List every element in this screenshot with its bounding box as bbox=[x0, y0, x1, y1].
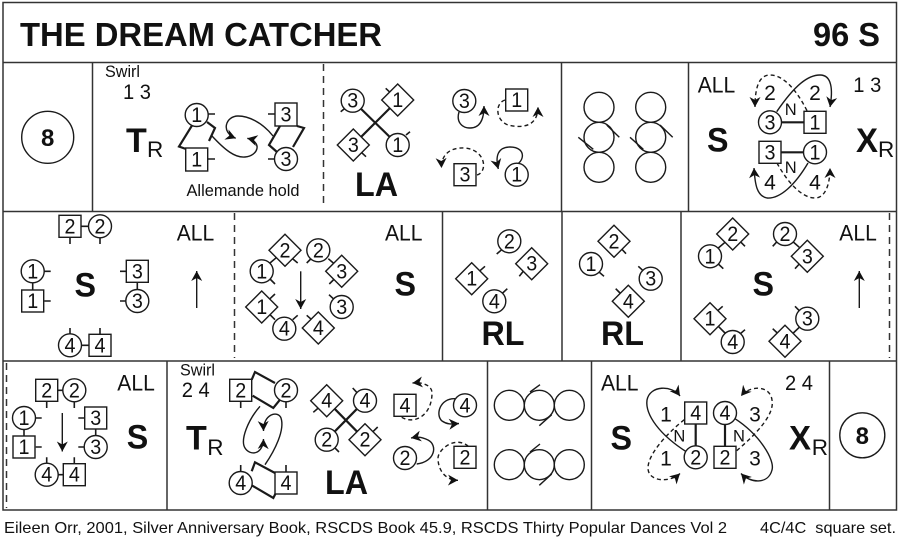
cross right symbol: X bbox=[856, 122, 878, 160]
dancer 4 circle bbox=[721, 330, 744, 354]
ticks bbox=[341, 88, 410, 157]
all label: ALL bbox=[385, 221, 422, 246]
dancer 2 square: 2 bbox=[720, 447, 730, 469]
couples 2 4: 2 4 bbox=[182, 379, 210, 402]
dancer 1 circle: 1 bbox=[586, 253, 596, 276]
panel: bars count start bbox=[22, 111, 74, 163]
couples 1 3: 1 3 bbox=[123, 81, 151, 104]
dancer 2 circle bbox=[63, 379, 86, 402]
dancer 2 diamond: 2 bbox=[609, 231, 619, 253]
dancer 3 lady bbox=[275, 103, 297, 127]
panel: left hands across 2 4 bbox=[311, 383, 476, 502]
set symbol: S bbox=[394, 265, 416, 303]
panel: bars count end: 8 bbox=[856, 423, 869, 450]
panel: left hands across bbox=[337, 84, 538, 204]
dancer 2 circle bbox=[315, 428, 338, 452]
cross right symbol bbox=[856, 122, 894, 162]
crossing paths bbox=[777, 75, 831, 112]
dancer 3 circle: 3 bbox=[336, 296, 347, 319]
panel: set advancing diamonds bbox=[694, 218, 877, 357]
bars count and nearer hands: 1 bbox=[660, 447, 672, 470]
bars count and nearer hands: 4 bbox=[809, 171, 821, 194]
ticks and links bbox=[270, 257, 334, 333]
bars count and nearer hands: 4 bbox=[764, 171, 776, 194]
ticks bbox=[480, 250, 523, 293]
panel: set retiring in diamonds bbox=[246, 221, 422, 344]
panel: reels of three bbox=[494, 385, 584, 485]
dancer 4 diamond bbox=[311, 385, 343, 417]
dancer 3 square: 3 bbox=[765, 142, 775, 164]
set symbol: S bbox=[707, 122, 728, 160]
dancer 2 circle: 2 bbox=[690, 447, 701, 469]
dancer 4 circle bbox=[714, 402, 736, 425]
arrow down bbox=[61, 413, 63, 452]
panel: set retiring square bbox=[12, 370, 155, 487]
arrow down bbox=[300, 271, 302, 309]
footer credit: Eileen Orr, 2001, Silver Anniversary Book, RSCDS Book 45.9, RSCDS Thirty Popular Dances Vol 2 bbox=[4, 520, 727, 537]
dancer 1 circle bbox=[21, 260, 44, 283]
dancer 2 circle: 2 bbox=[281, 380, 291, 402]
hand links bbox=[770, 122, 815, 152]
cross of hands bbox=[353, 100, 398, 145]
dancer 2 square bbox=[454, 446, 476, 469]
dancer 1 square bbox=[804, 111, 826, 134]
panel: set and cross right 1 3 bbox=[698, 72, 894, 198]
dancer 1 diamond bbox=[382, 84, 414, 116]
LA label: LA bbox=[355, 166, 398, 204]
dancer 4 diamond bbox=[769, 325, 801, 357]
ticks bbox=[208, 114, 275, 159]
dancer 2 square: 2 bbox=[460, 447, 470, 469]
dancer 4 diamond: 4 bbox=[313, 317, 324, 340]
dancer 3 man bbox=[274, 148, 298, 171]
panel: swirl turn 1 3 bbox=[105, 63, 304, 200]
dancer 3 diamond: 3 bbox=[336, 261, 347, 283]
dancer 2 circle bbox=[88, 215, 112, 238]
dancer 3 man: 3 bbox=[281, 148, 291, 171]
dancer 3 circle bbox=[758, 111, 782, 134]
dancer 3 diamond bbox=[326, 255, 358, 287]
dancer 4 circle: 4 bbox=[489, 291, 500, 313]
dancer 2 square: 2 bbox=[65, 216, 75, 238]
dancer 1 square: 1 bbox=[810, 112, 820, 134]
dancer 2 circle left: 2 bbox=[400, 447, 410, 470]
dancer 2 diamond: 2 bbox=[727, 223, 738, 246]
dancer 3 circle bbox=[84, 436, 107, 459]
dancer 1 circle bbox=[386, 134, 409, 157]
dancer 1 circle: 1 bbox=[810, 142, 820, 164]
cast curves bbox=[402, 383, 432, 420]
panel: rights and lefts one bbox=[456, 230, 548, 353]
dancer 2 diamond: 2 bbox=[280, 240, 290, 262]
dancer 1 circle lower: 1 bbox=[511, 164, 522, 187]
arrow up bbox=[196, 271, 198, 308]
allemande hold joins bbox=[252, 372, 280, 498]
dancer 2 square: 2 bbox=[41, 380, 52, 402]
cross right symbol bbox=[789, 420, 828, 460]
dancer 1 man bbox=[185, 104, 208, 127]
dancer 2 square bbox=[59, 215, 81, 238]
dancer 4 circle: 4 bbox=[360, 390, 370, 413]
dancer 4 circle bbox=[58, 334, 82, 357]
dancer 1 lady: 1 bbox=[191, 149, 202, 172]
dancer 3 square: 3 bbox=[132, 261, 143, 283]
cross right symbol: R bbox=[878, 137, 894, 162]
dancer 2 diamond bbox=[349, 424, 381, 456]
dancer 1 diamond: 1 bbox=[705, 308, 715, 331]
dancer 1 circle: 1 bbox=[705, 246, 715, 268]
dancer 2 diamond bbox=[717, 218, 749, 250]
dancer 4 square: 4 bbox=[400, 395, 410, 417]
dancer 1 square: 1 bbox=[27, 290, 38, 313]
couples 2 4: 2 4 bbox=[785, 372, 813, 395]
dancer 3 square: 3 bbox=[460, 164, 470, 187]
panel: set advancing square bbox=[21, 215, 214, 357]
panel: swirl turn 2 4 bbox=[180, 361, 298, 498]
dancer 4 circle bbox=[35, 463, 58, 487]
dancer 4 circle: 4 bbox=[235, 472, 246, 495]
set symbol: S bbox=[610, 420, 632, 458]
bars count and nearer hands: N bbox=[785, 101, 797, 119]
dancer 2 circle bbox=[774, 222, 796, 246]
turn right symbol: T bbox=[186, 420, 207, 458]
dancer 3 circle: 3 bbox=[802, 308, 813, 331]
dancer 3 circle: 3 bbox=[90, 436, 101, 459]
bars count and nearer hands: 1 bbox=[660, 403, 672, 426]
dancer 2 diamond: 2 bbox=[360, 429, 370, 452]
dancer 1 diamond: 1 bbox=[256, 296, 267, 319]
dancer 4 square: 4 bbox=[69, 464, 80, 487]
dancer 2 circle: 2 bbox=[95, 216, 105, 238]
RL label: RL bbox=[601, 315, 644, 353]
dancer 3 square bbox=[85, 407, 107, 430]
turn right symbol: R bbox=[147, 137, 163, 162]
dancer 1 diamond: 1 bbox=[392, 89, 403, 112]
panel: rights and lefts two bbox=[580, 225, 662, 353]
cross of hands bbox=[327, 401, 365, 440]
swirl label: Swirl bbox=[180, 361, 215, 379]
all label: ALL bbox=[601, 370, 638, 395]
dancer 1 circle bbox=[698, 245, 722, 268]
hand links bbox=[696, 413, 725, 457]
dancer 1 square bbox=[13, 436, 35, 459]
dancer 3 circle bbox=[330, 296, 353, 319]
dancer 3 square bbox=[126, 260, 148, 283]
dancer 3 circle bbox=[796, 307, 819, 331]
dancer 4 square: 4 bbox=[281, 472, 291, 495]
turn right symbol: R bbox=[207, 435, 224, 460]
dancer 3 circle lower: 3 bbox=[459, 90, 470, 113]
travel curves bbox=[243, 406, 264, 453]
dancer 4 diamond: 4 bbox=[623, 291, 634, 313]
title: THE DREAM CATCHER bbox=[20, 16, 382, 53]
duration and type: 96 S bbox=[813, 16, 880, 53]
all label: ALL bbox=[839, 221, 877, 246]
dancer 1 man: 1 bbox=[191, 104, 202, 127]
bars count and nearer hands: N bbox=[785, 159, 797, 177]
dancer 4 square: 4 bbox=[690, 402, 701, 425]
dancer 2 square bbox=[36, 379, 58, 402]
bars count and nearer hands: 2 bbox=[764, 82, 776, 105]
dancer 4 circle: 4 bbox=[727, 331, 738, 354]
ticks bbox=[241, 401, 286, 472]
bars count and nearer hands: 3 bbox=[749, 403, 761, 426]
dancer 1 square bbox=[22, 290, 44, 313]
dancer 1 square: 1 bbox=[511, 89, 522, 112]
set symbol: S bbox=[127, 419, 148, 457]
dancer 3 diamond: 3 bbox=[348, 134, 359, 157]
dancer 4 square bbox=[63, 464, 85, 487]
turn right symbol: T bbox=[126, 122, 147, 160]
travel curves bbox=[212, 136, 257, 157]
bars count and nearer hands: N bbox=[673, 427, 685, 445]
ticks bbox=[313, 388, 378, 452]
dancer 4 circle: 4 bbox=[720, 402, 730, 425]
dancer 2 circle: 2 bbox=[313, 240, 324, 262]
dancer 1 lady bbox=[186, 148, 208, 172]
bars count and nearer hands: 3 bbox=[749, 447, 761, 470]
dancer 2 circle: 2 bbox=[69, 380, 80, 402]
dancer 3 circle: 3 bbox=[765, 112, 775, 134]
ticks and links bbox=[33, 226, 137, 345]
dancer 4 square bbox=[89, 334, 111, 357]
crossing paths bbox=[647, 388, 687, 452]
dancer 4 square bbox=[394, 394, 416, 417]
dancer 2 square: 2 bbox=[235, 380, 246, 402]
bars count and nearer hands: 2 bbox=[809, 82, 821, 105]
dancer 3 square: 3 bbox=[90, 407, 101, 430]
cast curves bbox=[458, 106, 484, 128]
dancer 3 square bbox=[454, 164, 476, 187]
couples 1 3: 1 3 bbox=[853, 74, 881, 97]
dancer 3 circle: 3 bbox=[347, 90, 358, 113]
dancer 1 circle bbox=[12, 406, 36, 430]
ticks bbox=[599, 249, 643, 293]
turn right symbol bbox=[186, 420, 224, 460]
dancer 1 circle lower bbox=[505, 163, 528, 187]
dancer 1 circle: 1 bbox=[27, 261, 38, 283]
dancer 4 circle right: 4 bbox=[460, 395, 470, 417]
dancer 4 diamond bbox=[302, 312, 334, 344]
footer set type: 4C/4C square set. bbox=[760, 520, 896, 537]
ticks and links bbox=[718, 241, 799, 334]
set symbol: S bbox=[752, 265, 774, 303]
dancer 1 square: 1 bbox=[19, 436, 29, 459]
dancer 3 square bbox=[759, 141, 781, 164]
dancer 4 circle bbox=[273, 317, 296, 341]
dancer 1 circle: 1 bbox=[256, 261, 267, 283]
ticks and links bbox=[24, 390, 96, 475]
dancer 2 circle: 2 bbox=[780, 223, 790, 246]
swirl label: Swirl bbox=[105, 63, 140, 81]
set symbol: S bbox=[74, 266, 96, 304]
dancer 3 lady: 3 bbox=[281, 104, 291, 127]
dancer 3 circle lower bbox=[453, 90, 476, 113]
dancer 4 circle: 4 bbox=[279, 318, 290, 341]
dancer 4 diamond: 4 bbox=[780, 331, 790, 353]
panel: bars count end bbox=[840, 413, 885, 458]
dancer 4 square bbox=[685, 402, 707, 425]
cross right symbol: R bbox=[812, 435, 828, 460]
dancer 3 diamond bbox=[791, 240, 823, 272]
dancer 3 circle: 3 bbox=[645, 268, 656, 291]
dancer 1 diamond bbox=[246, 291, 278, 323]
all label: ALL bbox=[698, 72, 735, 97]
arrow up bbox=[858, 271, 860, 308]
dancer 3 circle: 3 bbox=[132, 290, 143, 313]
dancer 4 circle: 4 bbox=[65, 335, 75, 357]
cross right symbol: X bbox=[789, 420, 811, 458]
dancer 2 square bbox=[714, 446, 736, 469]
dancer 3 diamond bbox=[337, 129, 369, 161]
dancer 1 circle: 1 bbox=[19, 407, 29, 430]
all label: ALL bbox=[177, 221, 214, 246]
LA label: LA bbox=[325, 464, 368, 502]
dancer 1 diamond: 1 bbox=[466, 268, 477, 291]
dancer 4 square: 4 bbox=[95, 335, 105, 357]
bars count and nearer hands bbox=[660, 403, 761, 470]
RL label: RL bbox=[482, 315, 524, 353]
panel: reels of three across bbox=[578, 92, 673, 182]
dancer 1 diamond bbox=[694, 303, 726, 335]
dancer 1 circle bbox=[250, 260, 273, 283]
note: Allemande hold bbox=[186, 181, 300, 200]
dancer 2 circle left bbox=[394, 446, 416, 470]
dancer 2 circle bbox=[684, 446, 707, 469]
dancer 3 diamond: 3 bbox=[802, 246, 813, 268]
dancer 3 circle bbox=[341, 89, 364, 113]
bars count and nearer hands: N bbox=[733, 427, 745, 445]
dancer 4 circle bbox=[354, 389, 376, 413]
dancer 1 circle: 1 bbox=[392, 134, 403, 157]
dancer 1 square bbox=[506, 89, 528, 112]
dancer 2 circle: 2 bbox=[504, 231, 515, 253]
bars count and nearer hands bbox=[764, 82, 821, 194]
dancer 2 diamond bbox=[269, 234, 301, 266]
allemande hold joins bbox=[179, 122, 304, 152]
dancer 2 circle bbox=[307, 239, 330, 262]
dancer 3 diamond: 3 bbox=[526, 253, 537, 276]
dancer 4 diamond: 4 bbox=[321, 390, 332, 413]
panel: set and cross right 2 4 bbox=[601, 370, 828, 481]
turn right symbol bbox=[126, 122, 163, 162]
dancer 4 circle right bbox=[454, 394, 476, 417]
dancer 4 circle: 4 bbox=[41, 464, 52, 487]
dancer 3 circle bbox=[126, 290, 149, 313]
all label: ALL bbox=[117, 370, 155, 395]
dancer 1 circle bbox=[804, 141, 826, 164]
panel: bars count start: 8 bbox=[41, 125, 54, 152]
dancer 2 circle: 2 bbox=[321, 429, 332, 452]
